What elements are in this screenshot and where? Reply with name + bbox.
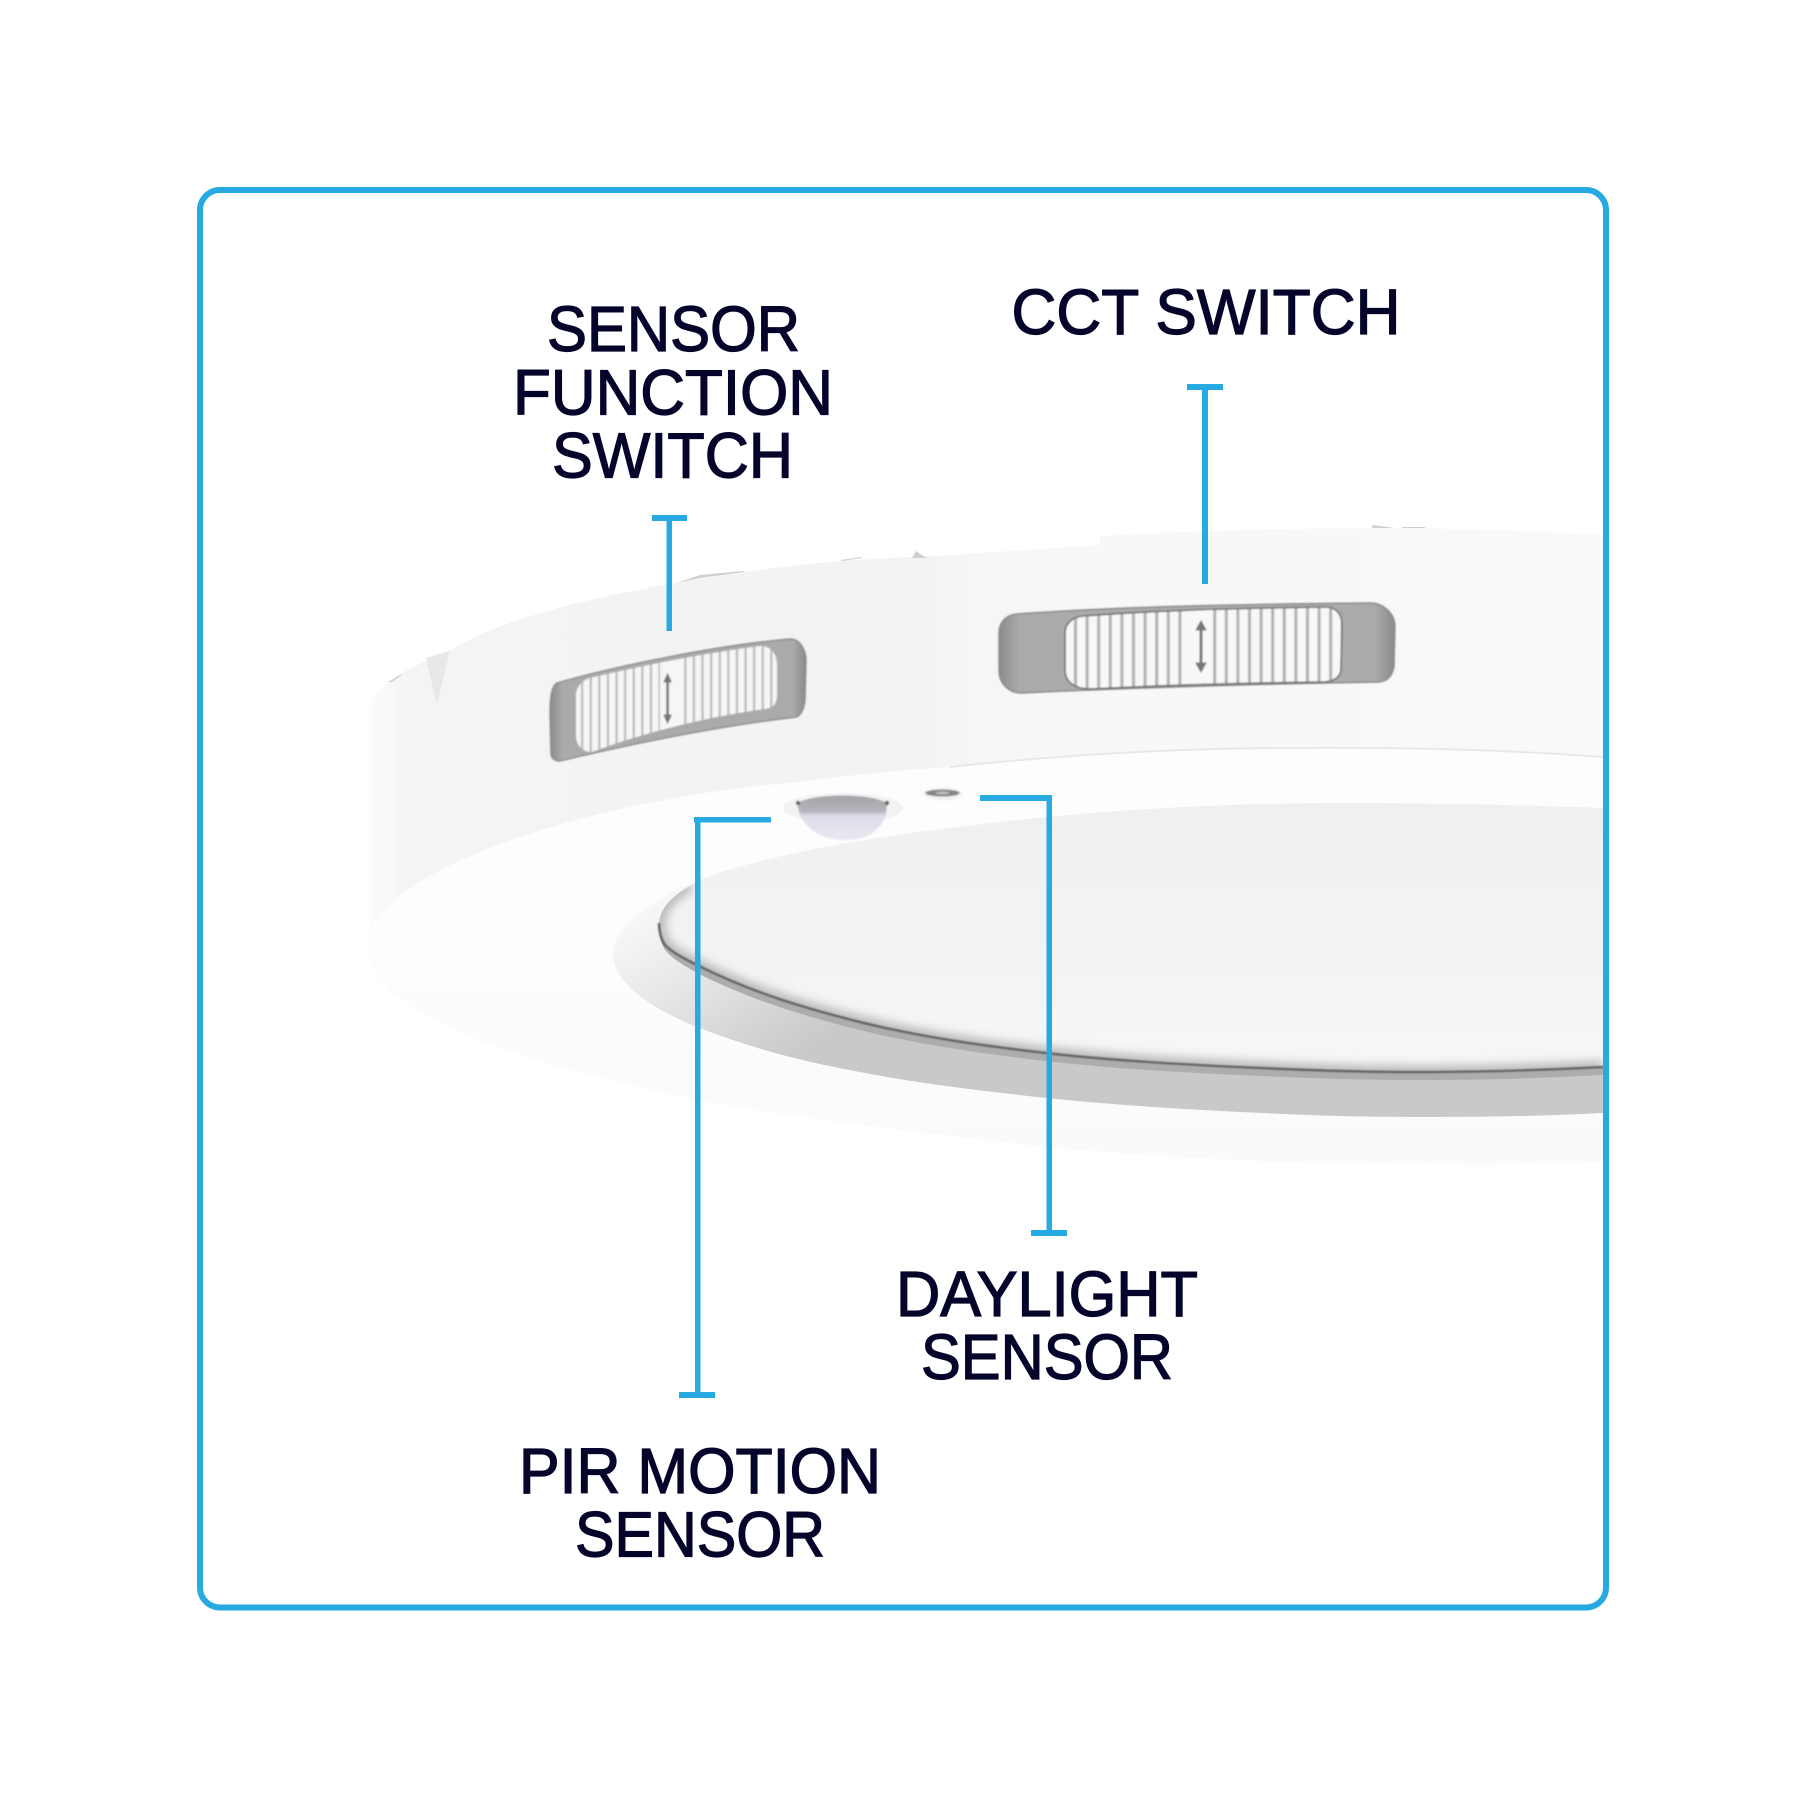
lens recess shadow xyxy=(613,915,1603,1117)
sensor function switch xyxy=(550,639,806,761)
label: sensor function switch: FUNCTION xyxy=(513,356,833,428)
product: LED fixture illustration xyxy=(367,525,1603,1164)
switch housing xyxy=(999,603,1395,693)
switch housing xyxy=(550,639,806,761)
up-down arrow xyxy=(664,674,671,723)
label: PIR motion sensor xyxy=(519,1435,881,1570)
arrow gap xyxy=(1188,610,1213,684)
CCT switch xyxy=(999,603,1395,693)
rim highlight line xyxy=(950,748,1603,767)
label: daylight sensor: SENSOR xyxy=(921,1321,1173,1393)
callout line: sensor function switch xyxy=(652,515,687,631)
fixture side wall xyxy=(393,536,1108,900)
daylight sensor dot xyxy=(923,788,963,800)
callout line: PIR motion sensor xyxy=(679,817,771,1398)
alignment triangle mark xyxy=(426,651,450,705)
PIR motion sensor dome xyxy=(783,793,903,840)
label: sensor function switch xyxy=(513,293,833,492)
diffuser lens xyxy=(659,803,1603,1072)
dark lens edge xyxy=(659,923,1603,1072)
fixture bottom face xyxy=(406,766,972,954)
label: PIR motion sensor: SENSOR xyxy=(575,1498,825,1570)
label: daylight sensor: DAYLIGHT xyxy=(896,1258,1198,1330)
infographic canvas xyxy=(197,187,1609,1610)
silver lens ring xyxy=(659,923,1603,1080)
blue panel border xyxy=(200,190,1606,1608)
callout line: daylight sensor xyxy=(980,795,1067,1236)
small top edge tabs xyxy=(388,525,1425,682)
label: daylight sensor xyxy=(896,1258,1198,1393)
knurled slider xyxy=(1065,607,1342,689)
label: PIR motion sensor: PIR MOTION xyxy=(519,1435,881,1507)
label: sensor function switch: SENSOR xyxy=(547,293,800,365)
label: sensor function switch: SWITCH xyxy=(552,420,793,492)
up-down arrow xyxy=(1196,621,1206,672)
callout line: CCT switch xyxy=(1187,384,1223,584)
label: CCT switch: CCT SWITCH xyxy=(1012,276,1400,348)
knurled slider xyxy=(575,645,778,752)
